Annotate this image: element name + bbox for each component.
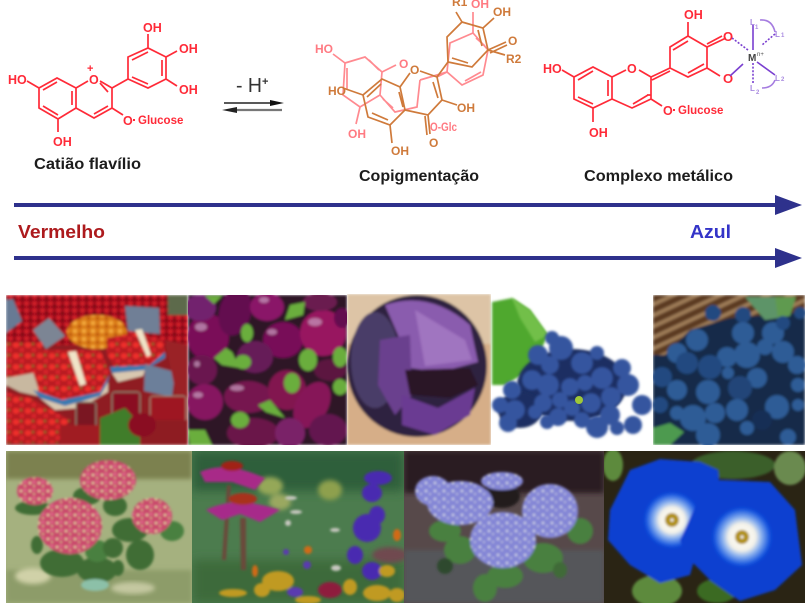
- molecule: copigmentation: OH: [457, 101, 475, 115]
- molecule: flavylium cation: HO: [8, 73, 27, 87]
- molecule: flavylium cation: Glucose: [138, 115, 183, 127]
- molecule: metal complex: [543, 8, 733, 140]
- molecule: flavylium cation: OH: [179, 42, 198, 56]
- molecule: metal complex: O: [723, 71, 733, 86]
- molecule: copigmentation: HO: [315, 42, 333, 56]
- label: Copigmentação: Copigmentação: [359, 168, 479, 185]
- metal ligands: 1: [755, 25, 759, 31]
- molecule: metal complex: O: [723, 29, 733, 44]
- photo: blue hydrangea: [404, 451, 604, 603]
- molecule: copigmentation: [315, 0, 522, 158]
- label: Vermelho: Vermelho: [18, 222, 105, 242]
- molecule: copigmentation: OH: [391, 144, 409, 158]
- molecule: copigmentation: O: [429, 136, 438, 150]
- metal ligands: L: [750, 18, 755, 27]
- metal ligands: L: [775, 30, 780, 39]
- molecule: copigmentation: O: [410, 63, 419, 77]
- photo: pink hydrangea: [6, 451, 192, 603]
- molecule: flavylium cation: O: [89, 73, 99, 87]
- photo: strawberries: [6, 295, 188, 445]
- molecule: metal complex: OH: [684, 8, 703, 22]
- molecule: copigmentation: OH: [493, 5, 511, 19]
- molecule: flavylium cation: OH: [179, 83, 198, 97]
- label: Complexo metálico: Complexo metálico: [584, 168, 733, 185]
- metal ligands: 2: [756, 90, 760, 96]
- label: Azul: Azul: [690, 222, 731, 242]
- metal ligands: L: [750, 84, 755, 93]
- photo: morning glories: [604, 451, 805, 603]
- photo: eggplants: [188, 295, 347, 445]
- molecule: copigmentation: O: [508, 34, 517, 48]
- molecule: metal complex: OH: [589, 126, 608, 140]
- photo: grapes: [492, 298, 652, 438]
- equilibrium arrows: +: [262, 76, 268, 88]
- molecule: metal complex: HO: [543, 62, 562, 76]
- molecule: flavylium cation: O: [123, 114, 133, 128]
- metal ligands: 2: [781, 77, 785, 83]
- metal ligands: M: [748, 53, 756, 64]
- equilibrium arrows: - H: [236, 75, 262, 97]
- top arrow: [14, 195, 802, 215]
- metal ligands: [730, 18, 785, 96]
- photo: red cabbage: [347, 294, 491, 445]
- bottom arrow: [14, 248, 802, 268]
- metal ligands: 1: [781, 33, 785, 39]
- molecule: copigmentation: O: [399, 57, 408, 71]
- molecule: metal complex: Glucose: [678, 105, 723, 117]
- molecule: copigmentation: OH: [348, 127, 366, 141]
- molecule: metal complex: O: [627, 62, 637, 76]
- photo: blueberries: [653, 295, 805, 445]
- molecule: metal complex: O: [663, 104, 673, 118]
- equilibrium arrows: [222, 75, 284, 113]
- molecule: flavylium cation: [8, 21, 198, 149]
- molecule: copigmentation: R2: [506, 52, 522, 66]
- molecule: flavylium cation: +: [87, 63, 93, 75]
- metal ligands: n+: [757, 52, 764, 58]
- photo: meadow flowers: [192, 451, 404, 603]
- molecule: copigmentation: O-Glc: [430, 120, 457, 134]
- molecule: flavylium cation: OH: [53, 135, 72, 149]
- molecule: flavylium cation: OH: [143, 21, 162, 35]
- label: Catião flavílio: Catião flavílio: [34, 156, 141, 173]
- metal ligands: L: [775, 74, 780, 83]
- molecule: copigmentation: HO: [328, 84, 346, 98]
